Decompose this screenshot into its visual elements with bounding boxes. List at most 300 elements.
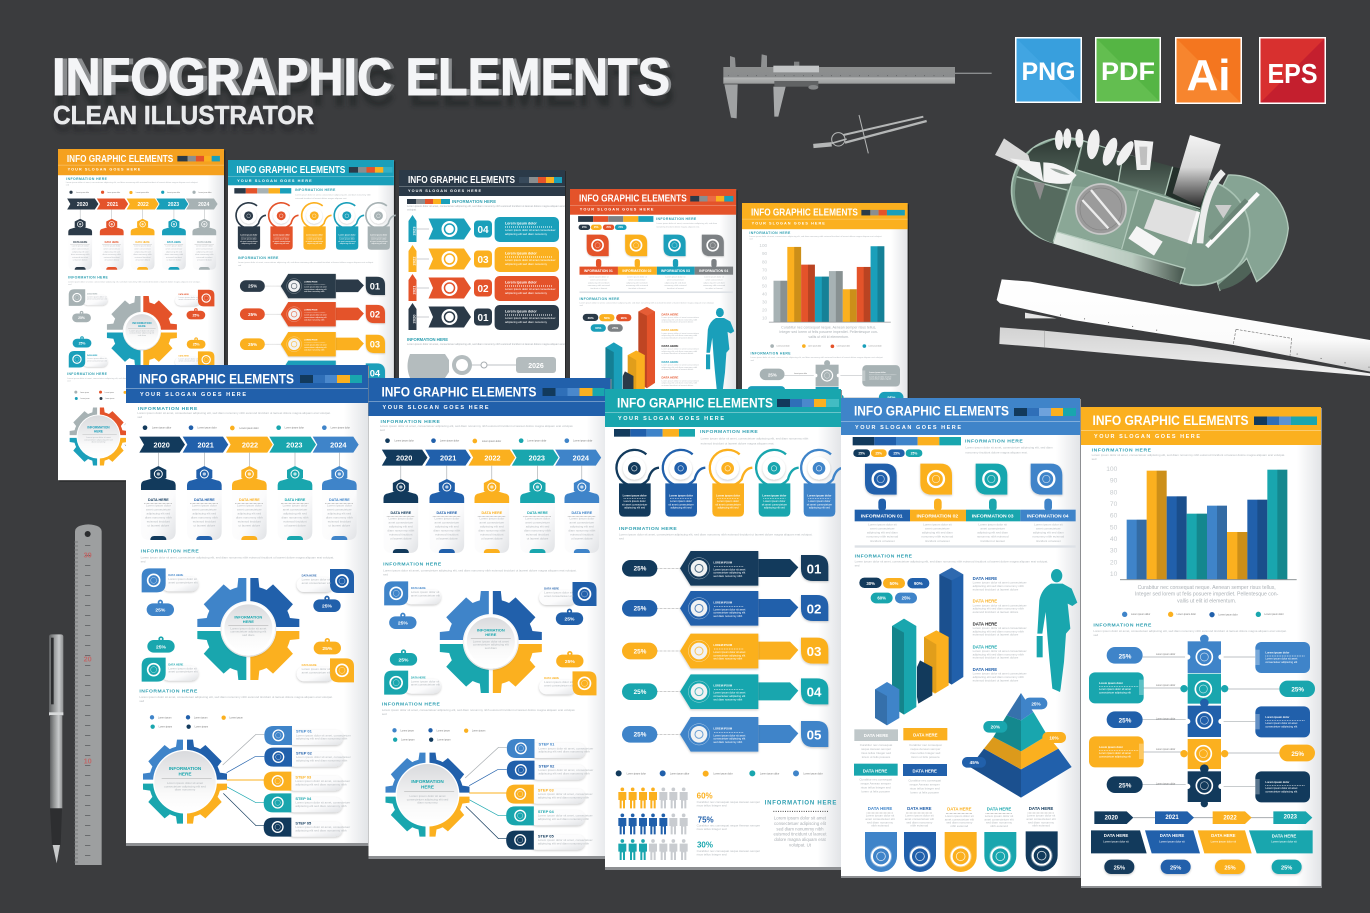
row 02: 02 [807, 601, 821, 616]
header: YOUR SLOGAN GOES HERE [140, 392, 246, 398]
heading: information here 2: INFORMATION HERE [619, 526, 677, 532]
data card 2: DATA HERE [1160, 833, 1184, 838]
gear with centre disc: consectetuer adipiscing elit sed [164, 784, 206, 788]
page: large timeline and gear sheet (left) [126, 365, 369, 846]
heading: information here 2: INFORMATION HERE [1093, 623, 1152, 629]
heading: information here: INFORMATION HERE [700, 429, 758, 435]
stat 60% [697, 791, 760, 807]
chevron timeline 2020-2024: 2023 [286, 440, 302, 449]
percent pills: bars: 30% [866, 581, 875, 586]
heading: information here: INFORMATION HERE [452, 199, 496, 204]
palette strip [853, 437, 961, 445]
illustration: steel ruler: 20 [84, 655, 92, 664]
data card 4: DATA HERE [1272, 833, 1296, 838]
bar chart [1120, 470, 1297, 580]
data box teal: DATA HERE [863, 768, 887, 773]
header: orange sheet: YOUR SLOGAN GOES HERE [68, 167, 141, 171]
ring card 2 [663, 450, 705, 517]
step 01: STEP 01 [296, 729, 313, 734]
legend: step dots: Lorem ipsum [158, 716, 172, 719]
header: blue: INFO GRAPHIC ELEMENTS [854, 404, 1009, 420]
header: yellow: YOUR SLOGAN GOES HERE [1094, 434, 1200, 440]
text: intro 2: sed [619, 537, 624, 541]
stat 30%: risus tellus Integer sed [697, 852, 727, 856]
text: intro 2: sed [141, 559, 146, 563]
information band [855, 510, 1076, 521]
axis labels: 100 [1106, 466, 1118, 473]
text: intro 2: sed [1093, 633, 1098, 637]
page: large process rows sheet [605, 389, 844, 870]
data list: DATA HERE [973, 621, 997, 626]
shield 2: DATA HERE [907, 806, 932, 811]
data card 3 [1198, 830, 1252, 853]
mini percent pills [853, 449, 922, 457]
page: large bar chart and puzzle sheet [1081, 407, 1322, 888]
ring card 3 [710, 450, 752, 517]
silhouette: businessman [1037, 569, 1077, 692]
text: intro 3 [139, 695, 333, 703]
row: 2020 / 01 [408, 303, 559, 330]
callout: bottom right: DATA HERE [302, 663, 317, 667]
legend: Lorem ipsum dolor [1131, 613, 1151, 616]
text: intro 2: Lorem ipsum dolor sit amet, consectetuer adipiscing elit, sed diam nonummy nibh euismod tincidunt ut laoreet dolore magna aliquam erat volutpat. [619, 533, 813, 537]
legend: five dots: Lorem ipsum dolor [713, 773, 733, 776]
row: 2023 / 04: 04 [477, 225, 489, 236]
icon: EPS badge [1259, 37, 1326, 104]
row 03 [622, 634, 828, 668]
shield 2 [904, 806, 936, 872]
subtitle: CLEAN ILLUSTRATOR [54, 107, 316, 137]
row 05 [622, 717, 828, 752]
data list [973, 576, 1027, 682]
step 05: STEP 05 [295, 820, 312, 825]
tile 03 [976, 464, 1007, 511]
data box blue: DATA HERE [912, 769, 937, 774]
small timeline 2020-2023: 2023 [1284, 815, 1298, 821]
chart caption: Integer sed lorem ut felis posuere imperdiet. Pellentesque con- [1135, 592, 1279, 598]
pill: 25% row 3: 25% [1119, 718, 1132, 725]
text block: information here: INFORMATION HERE [765, 800, 836, 806]
row 01: 25% [634, 566, 647, 573]
legend: five dots: Lorem ipsum dolor [331, 427, 350, 430]
data box yellow: DATA HERE [913, 732, 938, 737]
axis labels: 40 [1110, 536, 1118, 543]
heading: information here 2: INFORMATION HERE [407, 337, 448, 342]
header: blue [841, 398, 1080, 435]
chevron timeline 2020-2024: 2020 [154, 440, 170, 449]
text: intro 2: Lorem ipsum dolor sit amet, consectetuer adipiscing elit, sed diam nonummy nibh euismod tincidunt ut laoreet dolore magna aliquam erat volutpat. [1093, 629, 1287, 633]
row 01: 01 [807, 561, 822, 576]
row: 2022 / 03: 2022 [412, 256, 416, 265]
header: teal sheet: YOUR SLOGAN GOES HERE [237, 179, 312, 183]
icon: Ai badge: Ai [1186, 51, 1230, 100]
percent pills [147, 596, 341, 654]
info box row 2 [1089, 672, 1144, 703]
row 02: 25% [634, 606, 647, 613]
axis labels: 90 [1110, 478, 1118, 485]
step 04: STEP 04 [295, 796, 312, 801]
row: 2021 / 02: 02 [477, 284, 489, 295]
percent pills: bars: 50% [890, 581, 898, 586]
gear chart: Lorem ipsum dolor sit amet [230, 626, 266, 630]
callout: bottom left [142, 658, 198, 682]
small timeline 2020-2023 [1094, 811, 1312, 824]
illustration: steel ruler: 30 [84, 551, 92, 560]
callout: bottom right: amet consectetuer elit [302, 670, 331, 674]
data list: DATA HERE [973, 667, 997, 672]
text: intro [1092, 453, 1285, 461]
axis labels: 70 [1110, 501, 1118, 508]
chevron timeline 2020-2024: 2021 [198, 440, 214, 449]
ring card 5 [801, 450, 844, 517]
callout: top right: amet consectetuer elit [302, 581, 331, 585]
data box grey: DATA HERE [864, 733, 888, 738]
small timeline 2020-2023: 2020 [1105, 816, 1119, 822]
page: large timeline and gear sheet (second) [368, 378, 612, 859]
column: 2023: DATA HERE [285, 498, 306, 502]
icon: EPS badge: EPS [1268, 58, 1318, 89]
gear with centre disc [143, 740, 227, 824]
data card 2 [1145, 830, 1200, 853]
text block: information here: dolore magna aliquam erat [774, 837, 827, 842]
callout: top left: DATA HERE [168, 573, 184, 577]
text: intro 2: sed [855, 564, 860, 568]
axis labels: 60 [1110, 513, 1118, 520]
text: intro 3: sed [139, 699, 144, 703]
legend: Lorem ipsum dolor [1218, 613, 1238, 616]
row 04: 25% [634, 689, 647, 696]
info box row 5 [1255, 771, 1310, 802]
tile 02 [920, 464, 952, 511]
row 02 [622, 591, 828, 626]
data box teal [854, 764, 898, 794]
header [126, 365, 368, 403]
illustration: rolled blueprints [997, 279, 1370, 376]
illustration: pen [49, 634, 63, 863]
axis labels: 20 [1110, 559, 1118, 566]
data card 1 [1091, 830, 1147, 853]
palette strip [407, 199, 450, 204]
info box row 3 [1255, 706, 1310, 737]
percent pills: pyramid: 25% [1031, 701, 1042, 706]
legend [1122, 612, 1284, 617]
info box row 1 [1255, 642, 1310, 673]
row 01 [622, 551, 828, 586]
bottom percent pills: 25% [1281, 865, 1292, 871]
text: intro 2 [619, 533, 813, 541]
puzzle piece 4 [1180, 739, 1228, 769]
text: intro: sed [137, 415, 142, 419]
step 04 [264, 793, 350, 812]
icon: PDF badge [1095, 37, 1161, 103]
sheet body: rings, rows, pictograms [614, 429, 844, 860]
pill: 25% row 5 [1107, 776, 1143, 793]
pill: 25% row 5: 25% [1119, 783, 1132, 790]
legend: five dots: Lorem ipsum dolor [152, 427, 172, 430]
header: teal [605, 389, 841, 427]
gear with centre disc: INFORMATION [169, 766, 202, 771]
shield 5 [1026, 806, 1058, 871]
header: yellow [1081, 407, 1321, 445]
text: intro: Lorem ipsum dolor sit amet, consectetuer adipiscing elit, sed diam nonummy nibh euismod tincidunt ut laoreet dolore magna aliquam erat volutpat. [1092, 453, 1285, 457]
step 03 [264, 772, 350, 791]
row: 2023 / 04: 2023 [412, 226, 416, 235]
column: 2020: DATA HERE [148, 498, 169, 502]
connector lines [1143, 657, 1279, 786]
mini percent pills: 25% [893, 451, 900, 455]
page: small orange timeline sheet [58, 149, 225, 482]
text: intro: sed [1092, 457, 1097, 461]
pill: 25% row 1 [1107, 647, 1143, 664]
header: yellow sheet: YOUR SLOGAN GOES HERE [752, 221, 825, 225]
data card 1: DATA HERE [1104, 833, 1128, 838]
header: dark sheet: INFO GRAPHIC ELEMENTS [408, 175, 515, 186]
legend: step dots: Lorem ipsum [159, 726, 172, 729]
data list: DATA HERE [973, 599, 997, 604]
percent pills: pyramid: 10% [1049, 735, 1060, 740]
legend: step dots [150, 715, 243, 729]
heading: information here 3: INFORMATION HERE [139, 688, 198, 694]
header: yellow: INFO GRAPHIC ELEMENTS [1092, 413, 1248, 429]
percent pills: pyramid [962, 698, 1066, 768]
heading: information here: INFORMATION HERE [138, 406, 198, 412]
text: intro 2 [141, 555, 334, 563]
text block: information here: Lorem ipsum dolor sit amet [774, 816, 827, 821]
page: small red isometric sheet [570, 189, 737, 523]
header: second sheet [368, 378, 610, 416]
information band: INFORMATION 04 [1027, 513, 1069, 519]
timeline fragment 2026: 2026 [528, 363, 544, 370]
pictogram row 60% [618, 787, 688, 808]
legend: step dots: Lorem ipsum [229, 717, 243, 720]
sheet body: timeline, gear, steps [137, 406, 359, 837]
callout: top right: DATA HERE [302, 574, 317, 578]
chart caption: Curabitur nec consequat neque. Aenean semper risus tellus, [1138, 585, 1276, 591]
pill: 25% row 4: 25% [1291, 751, 1304, 758]
callout: bottom right: Lorem ipsum dolor sit [302, 667, 330, 671]
data box blue [903, 764, 947, 794]
data list: DATA HERE [973, 576, 997, 581]
legend: five dots [143, 425, 350, 430]
palette strip [614, 429, 695, 437]
step 02 [264, 748, 351, 767]
axis labels: 10 [1110, 571, 1118, 578]
ring card 1 [616, 450, 659, 517]
header: teal: INFO GRAPHIC ELEMENTS [617, 396, 773, 412]
step 01 [264, 726, 351, 745]
heading: information here 2: INFORMATION HERE [141, 549, 199, 555]
title: INFOGRAPHIC ELEMENTS [53, 59, 675, 118]
text: intro [137, 411, 331, 419]
text block: information here: euismod tincidunt ut laoreet [774, 832, 827, 837]
pill: 25% row 2 [1279, 681, 1315, 697]
row: 2021 / 02 [408, 274, 559, 301]
header: red sheet [570, 189, 736, 215]
puzzle labels: Lorem ipsum dolor [1156, 718, 1176, 721]
callout: bottom right [297, 658, 354, 682]
text: intro 2: Lorem ipsum dolor sit amet, consectetuer adipiscing elit, sed diam nonummy nibh euismod tincidunt ut laoreet dolore magna aliquam erat [407, 342, 565, 346]
row: 2020 / 01: 2020 [412, 314, 416, 323]
stat 75%: Curabitur nec consequat neque Aenean semper [697, 824, 760, 828]
percent pills: bars: 25% [902, 596, 910, 601]
text: intro [701, 436, 809, 445]
stat 30%: Curabitur nec consequat neque Aenean semper [697, 849, 760, 853]
gear with centre disc: Lorem ipsum dolor sit amet [167, 781, 203, 785]
illustration: desk tray with tools [995, 124, 1288, 299]
stat 30%: 30% [697, 840, 713, 849]
chart caption: vallis ut elit id elementum. [1177, 598, 1236, 604]
column: 2022: DATA HERE [239, 498, 260, 502]
header: dark sheet: YOUR SLOGAN GOES HERE [408, 189, 481, 193]
percent pills: bars: 60% [877, 596, 886, 601]
tile 04 [1031, 464, 1062, 511]
gear chart: consectetuer adipiscing elit [230, 630, 266, 634]
percent pills: bars [859, 578, 929, 603]
percent pills: bars: 90% [914, 581, 923, 586]
pill: 25% row 1: 25% [1119, 653, 1132, 660]
text: intro: Lorem ipsum dolor sit amet, consectetuer adipiscing elit, sed diam nonummy nibh [701, 436, 809, 440]
step 02: STEP 02 [296, 750, 313, 755]
small timeline 2020-2023: 2022 [1223, 815, 1237, 821]
legend: Lorem ipsum dolor [1177, 613, 1196, 616]
shield 5: DATA HERE [1029, 806, 1053, 811]
stat 75%: 75% [698, 815, 714, 824]
header: teal: YOUR SLOGAN GOES HERE [618, 416, 724, 422]
illustration: steel ruler [75, 524, 102, 865]
puzzle labels: Lorem ipsum dolor [1156, 684, 1176, 687]
row 03: 03 [807, 644, 821, 659]
text: intro: volutpat [407, 208, 416, 212]
callout: top left: Lorem ipsum dolor sit [168, 577, 197, 581]
gear with centre disc: diam nonummy [175, 788, 196, 792]
legend: five dots: Lorem ipsum dolor [627, 772, 646, 775]
puzzle labels: Lorem ipsum dolor [1156, 782, 1176, 785]
text: intro: euismod tincidunt ut laoreet dolore magna aliquam erat. [701, 441, 774, 445]
callout: top left: amet consectetuer elit [168, 580, 198, 584]
heading: information here: INFORMATION HERE [965, 439, 1023, 445]
text: intro: nonummy tincidunt dolore magna aliquam erat. [965, 451, 1028, 455]
text: intro: Lorem ipsum dolor sit amet, consectetuer adipiscing elit, sed diam [965, 446, 1053, 450]
subtitle: CLEAN ILLUSTRATOR [53, 100, 314, 130]
callout: top right: Lorem ipsum dolor sit [302, 578, 330, 582]
column: 2022 [232, 453, 267, 540]
info box row 4 [1089, 736, 1144, 767]
gear chart: sed diam [242, 633, 255, 637]
legend: five dots: Lorem ipsum dolor [803, 772, 823, 775]
header: second sheet: YOUR SLOGAN GOES HERE [382, 405, 489, 411]
title: INFOGRAPHIC ELEMENTS [57, 48, 673, 107]
page: small dark timeline sheet [399, 170, 566, 501]
puzzle labels: Lorem ipsum dolor [1156, 748, 1176, 751]
row: 2023 / 04 [408, 215, 559, 242]
pyramid chart [970, 693, 1072, 798]
row: 2021 / 02: 2021 [412, 285, 416, 294]
step 05 [264, 818, 350, 837]
data list: DATA HERE [973, 644, 997, 649]
page: large isometric data sheet [841, 398, 1081, 878]
legend: five dots [616, 770, 823, 777]
puzzle piece 2 [1180, 674, 1228, 704]
icon: caliper [723, 54, 992, 118]
data card 4 [1249, 830, 1313, 853]
column: 2021 [187, 453, 222, 540]
text: intro 2: Lorem ipsum dolor sit amet, consectetuer adipiscing elit, sed diam nonummy nibh euismod tincidunt ut laoreet dolore magna aliquam erat volutpat. [855, 560, 1048, 564]
legend: five dots: Lorem ipsum dolor [197, 427, 217, 430]
tile 01 [865, 464, 897, 511]
row: 2022 / 03: 03 [477, 255, 489, 266]
puzzle labels [1156, 653, 1176, 785]
data card 1: Lorem ipsum dolor sit [1103, 839, 1129, 843]
chart caption [1135, 585, 1279, 604]
text: intro 2 [1093, 629, 1287, 637]
legend: five dots: Lorem ipsum dolor [285, 427, 304, 430]
axis labels: 30 [1110, 548, 1118, 555]
information band: INFORMATION 01 [861, 513, 903, 519]
sheet body: tiles, isometric bars, pyramid [853, 437, 1077, 872]
column: 2023 [278, 453, 312, 540]
puzzle piece 1 [1185, 635, 1224, 673]
pill: 25% row 4 [1279, 745, 1315, 761]
stat 60%: 60% [697, 791, 713, 800]
chevron timeline 2020-2024: 2022 [242, 440, 258, 449]
header: yellow sheet: INFO GRAPHIC ELEMENTS [751, 207, 858, 218]
puzzle piece 3 [1185, 699, 1224, 737]
legend: step dots: Lorem ipsum [194, 716, 208, 719]
puzzle piece 5 [1185, 764, 1224, 807]
callout: top right [297, 569, 354, 593]
text: intro [407, 204, 565, 212]
header: orange sheet: INFO GRAPHIC ELEMENTS [67, 154, 174, 165]
mini percent pills: 25% [858, 451, 865, 455]
percent pills: pyramid: 45% [970, 760, 980, 765]
chevron timeline 2020-2024: 2024 [330, 440, 347, 449]
stat 60%: risus tellus Integer sed [697, 803, 727, 807]
pictogram row 30% [618, 839, 688, 860]
text: intro 3: Lorem ipsum dolor sit amet, consectetuer adipiscing elit, sed diam nonummy nibh euismod tincidunt ut laoreet dolore magna aliquam erat volutpat. [139, 695, 333, 699]
timeline fragment 2026 [408, 354, 556, 378]
text: intro: Lorem ipsum dolor sit amet, consectetuer adipiscing elit, sed diam nonummy nibh euismod tincidunt ut laoreet dolore magna aliquam erat volutpat. [137, 411, 331, 415]
column: 2024: DATA HERE [329, 498, 350, 502]
shield 3: DATA HERE [947, 806, 972, 811]
header: orange sheet [58, 149, 224, 175]
header: INFO GRAPHIC ELEMENTS [139, 371, 294, 387]
callout: bottom left: DATA HERE [168, 662, 184, 666]
data box yellow [903, 728, 947, 759]
text columns under band [866, 522, 1065, 543]
row: 2022 / 03 [408, 245, 559, 272]
text: intro 2: Lorem ipsum dolor sit amet, consectetuer adipiscing elit, sed diam nonummy nibh euismod tincidunt ut laoreet dolore magna aliquam erat volutpat. [141, 555, 334, 559]
chevron timeline 2020-2024 [139, 437, 359, 453]
header: yellow sheet [742, 203, 908, 229]
data box grey [854, 729, 898, 759]
callout: bottom left: Lorem ipsum dolor sit [168, 666, 197, 670]
text block: information here [765, 800, 836, 848]
axis labels: 50 [1110, 524, 1118, 531]
icon: PNG badge: PNG [1022, 58, 1076, 86]
header: red sheet: YOUR SLOGAN GOES HERE [580, 208, 654, 212]
callout: top left [142, 568, 198, 592]
information band: INFORMATION 02 [916, 513, 958, 519]
gear chart [197, 578, 299, 680]
ring card 4 [756, 450, 799, 517]
axis labels [1106, 466, 1118, 578]
bottom percent pills: 25% [1170, 865, 1181, 871]
column: 2024 [322, 453, 357, 540]
legend: five dots: Lorem ipsum dolor [670, 772, 690, 775]
bottom percent pills [1104, 860, 1302, 874]
title: INFOGRAPHIC ELEMENTS [52, 48, 670, 107]
pictogram row 75% [618, 813, 688, 834]
